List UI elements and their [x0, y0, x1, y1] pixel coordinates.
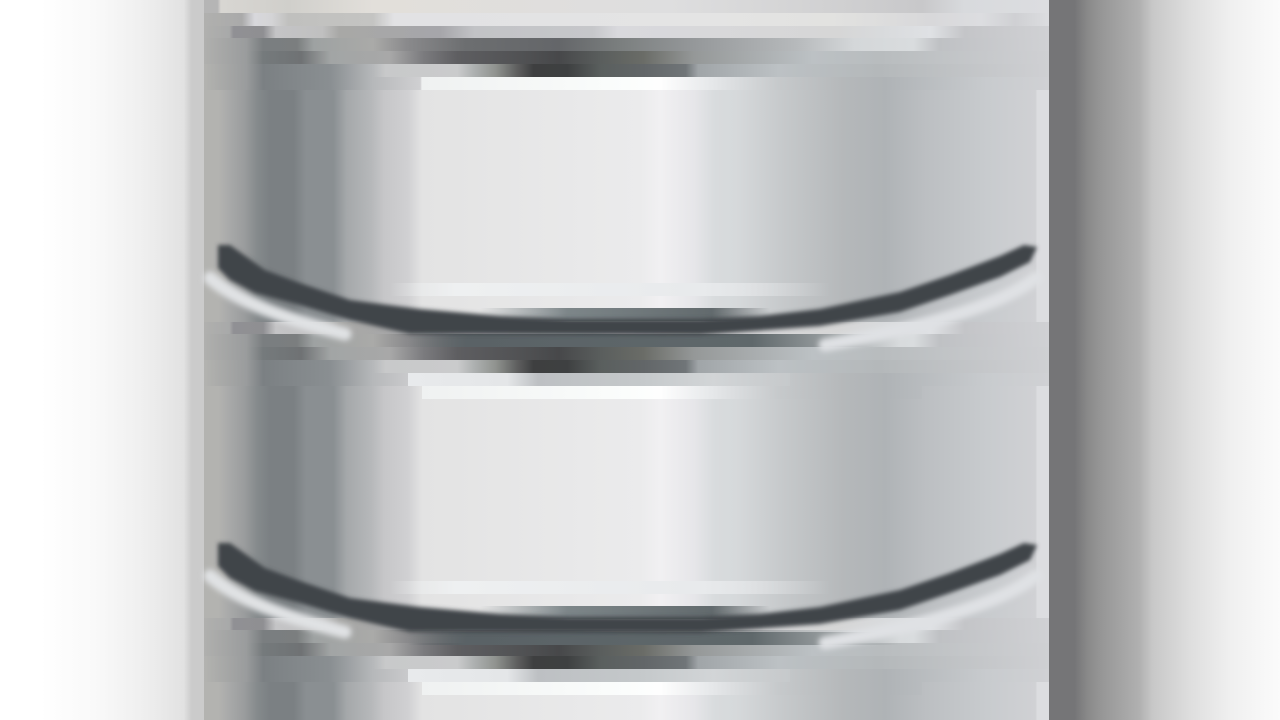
upper drum shading [204, 26, 1049, 90]
right drop shadow [1049, 0, 1280, 720]
middle drum shading [204, 322, 1049, 399]
middle ring groove [210, 543, 1037, 645]
lower drum shading [204, 618, 1049, 695]
cylinder body [204, 0, 1049, 720]
upper ring groove [210, 245, 1037, 347]
top disk rim [204, 0, 1049, 26]
left drop shadow [0, 0, 204, 720]
